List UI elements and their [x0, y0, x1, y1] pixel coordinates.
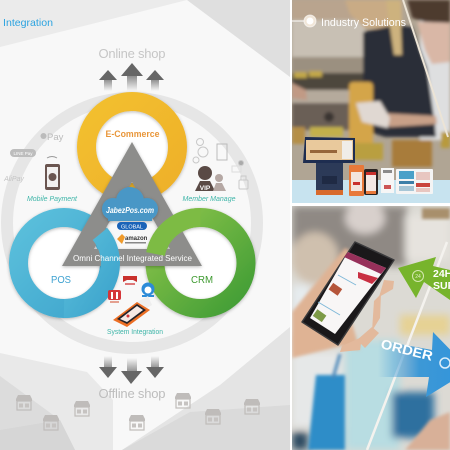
hand fingers [340, 280, 394, 352]
device: tablet screens [396, 169, 433, 194]
panel: mobile ordering photo [291, 202, 450, 450]
icon: VIP member [195, 166, 226, 192]
arrow: ORDER blue [378, 332, 450, 397]
arrows: up to online shop [99, 63, 164, 91]
label: System Integration: System Integration [107, 329, 163, 336]
grey triangle [62, 142, 202, 266]
green ring overlap arc [156, 217, 200, 254]
icon: mobile payment phone [45, 156, 60, 190]
heading: Industry Solutions: Industry Solutions [321, 17, 406, 29]
device: orange handheld [349, 165, 364, 196]
heading: Integration: Integration [3, 17, 53, 29]
hand back [292, 248, 360, 358]
label: Mobile Payment: Mobile Payment [27, 196, 78, 203]
label: E-Commerce: E-Commerce [106, 129, 160, 140]
icon: red brand [108, 290, 121, 303]
device: black phone [364, 169, 378, 195]
arrow: ORDER blue: ORDER [379, 336, 435, 364]
shopping bag [308, 354, 345, 450]
light blue strip [292, 180, 450, 203]
bottom right hand [405, 412, 450, 450]
blue ring overlap arc [64, 234, 110, 309]
device: handheld POS [113, 296, 152, 327]
diagonal white line [403, 0, 448, 137]
phone [302, 242, 394, 345]
label: Omni Channel Integrated Service: Omni Channel Integrated Service [73, 254, 193, 263]
icon: LINE Pay [10, 149, 36, 157]
icon: red phone brand [123, 276, 137, 285]
icon: Apple Pay [40, 133, 64, 142]
arrows: down to offline shop [99, 356, 164, 384]
heading marker [292, 15, 316, 27]
icon: wallet brand: AliPay [3, 176, 24, 183]
label: Member Manage: Member Manage [182, 196, 236, 203]
label: CRM: CRM [191, 275, 213, 286]
icon: VIP member: VIP [200, 185, 211, 192]
panel: left integration background [0, 0, 290, 450]
ring: CRM green base [155, 218, 246, 308]
label: POS: POS [51, 275, 71, 286]
badge: GLOBAL [117, 222, 147, 230]
panel: industry solutions photo [292, 0, 450, 203]
device: white phone [381, 168, 394, 193]
icon: Apple Pay: Pay [47, 132, 64, 143]
icon: LINE Pay: LINE Pay [13, 151, 33, 156]
ring: E-Commerce yellow [86, 102, 178, 192]
ring: POS blue base [18, 218, 110, 308]
icons: shop row [16, 393, 260, 430]
heading: Offline shop: Offline shop [98, 386, 166, 401]
logo: amazon web services [117, 234, 148, 244]
icons: loyalty points [193, 138, 248, 189]
heading: Online shop: Online shop [98, 46, 166, 61]
device: POS terminal [303, 137, 355, 195]
arrow: 24H support green: 24 [415, 274, 421, 280]
logo: amazon web services: amazon [125, 236, 148, 242]
badge: GLOBAL: GLOBAL [121, 224, 143, 230]
cloud logo: JabezPos.com [106, 206, 154, 215]
big grey ring [7, 98, 257, 348]
arrow: 24H support green [398, 257, 450, 300]
icon: blue mascot [142, 282, 154, 297]
cloud logo [102, 187, 158, 221]
diagonal white line [367, 242, 447, 450]
